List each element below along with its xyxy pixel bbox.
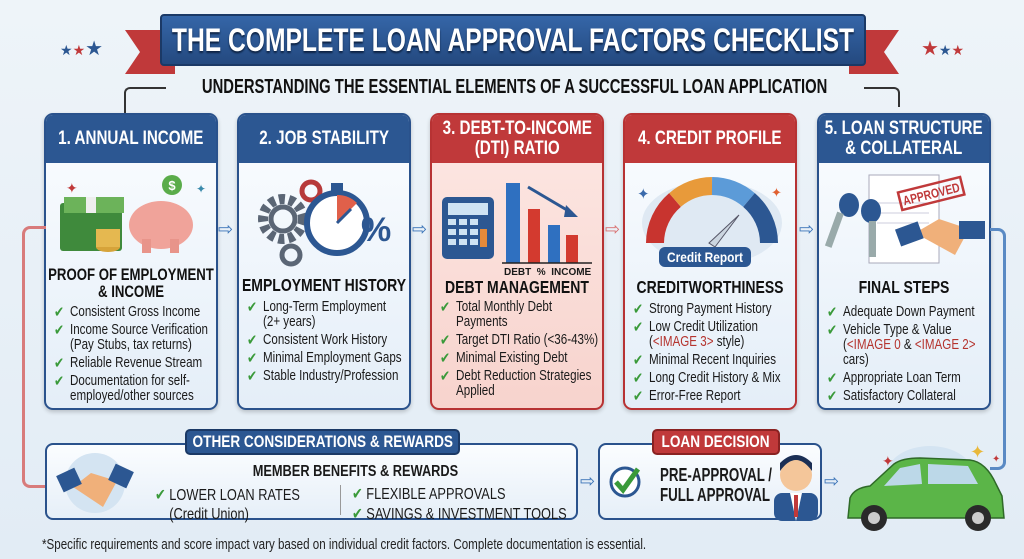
icon: green car: ✦ — [970, 442, 985, 462]
panel: credit profile: 4. CREDIT PROFILE — [638, 128, 782, 149]
text: member benefits: MEMBER BENEFITS & REWARDS — [253, 463, 458, 480]
icon: credit gauge — [637, 177, 782, 267]
icon: gears and stopwatch — [258, 180, 391, 266]
panel: DTI ratio — [430, 113, 604, 410]
text: proof of employment: Reliable Revenue Stream — [70, 355, 202, 371]
text: creditworthiness: Minimal Recent Inquiries — [649, 352, 776, 368]
title banner: THE COMPLETE LOAN APPROVAL FACTORS CHECKLIST — [172, 22, 854, 58]
arrow: right loop — [990, 228, 1006, 470]
text: proof of employment: Documentation for self-employed/other sources — [70, 373, 194, 404]
arrow: 3 to 4: ⇨ — [605, 219, 620, 239]
icon: green car: ✦ — [882, 453, 894, 469]
text: employment history: Minimal Employment Gaps — [263, 350, 402, 366]
icon: green car — [847, 442, 1005, 531]
icon: banker — [774, 455, 818, 521]
text: creditworthiness: Long Credit History & Mix — [649, 370, 781, 386]
text: debt management: Target DTI Ratio (<36-43%) — [456, 332, 598, 348]
subtitle — [124, 76, 900, 113]
icon: stars right: ★★★ — [921, 38, 964, 60]
panel: DTI ratio: 3. DEBT-TO-INCOME — [442, 118, 592, 139]
text: final steps: Vehicle Type & Value (<IMAGE 0 & <IMAGE 2> cars) — [843, 322, 976, 368]
text: employment history: Stable Industry/Profession — [263, 368, 398, 384]
panel: other considerations: ✔ FLEXIBLE APPROVALS — [352, 486, 505, 503]
text: pre-approval — [660, 465, 772, 505]
text: final steps: FINAL STEPS — [859, 277, 949, 297]
icon: handshake — [56, 453, 134, 513]
arrow: left loop back — [22, 226, 46, 488]
text: pre-approval: FULL APPROVAL — [660, 485, 770, 505]
text: creditworthiness — [634, 277, 784, 404]
panel: credit profile — [623, 113, 797, 410]
text: employment history: Consistent Work History — [263, 332, 387, 348]
panel: annual income — [44, 113, 218, 410]
subtitle: UNDERSTANDING THE ESSENTIAL ELEMENTS OF A SUCCESSFUL LOAN APPLICATION — [202, 76, 828, 98]
panel: other considerations: ✔ SAVINGS & INVESTMENT TOOLS — [352, 506, 567, 523]
text: creditworthiness: Error-Free Report — [649, 388, 741, 404]
heading: other considerations: OTHER CONSIDERATIONS & REWARDS — [192, 432, 453, 451]
text: proof of employment: & INCOME — [98, 283, 164, 301]
text: creditworthiness: Low Credit Utilization (<IMAGE 3> style) — [649, 319, 758, 350]
icon: keys, approved doc, handshake: APPROVED — [901, 180, 961, 208]
panel: annual income: 1. ANNUAL INCOME — [58, 128, 204, 149]
title banner — [60, 14, 964, 74]
text: employment history — [242, 275, 406, 384]
panel: job stability: 2. JOB STABILITY — [259, 128, 389, 149]
footer note: *Specific requirements and score impact vary based on individual credit factors. Complete documentation is essential. — [42, 537, 646, 553]
arrow: 4 to 5: ⇨ — [799, 219, 814, 239]
icon: money and piggy bank: $ — [168, 178, 176, 193]
heading: other considerations — [185, 429, 460, 455]
text: final steps: Satisfactory Collateral — [843, 388, 956, 404]
text: debt management — [441, 277, 598, 399]
text: employment history: EMPLOYMENT HISTORY — [242, 275, 406, 295]
panel: loan structure — [817, 113, 991, 410]
text: employment history: Long-Term Employment (2+ years) — [263, 299, 386, 330]
arrow: to car: ⇨ — [824, 471, 839, 491]
arrow: 1 to 2: ⇨ — [218, 219, 233, 239]
icon: money and piggy bank — [60, 175, 206, 253]
icon: credit gauge: ✦ — [771, 185, 782, 200]
text: final steps: Appropriate Loan Term — [843, 370, 961, 386]
text: proof of employment: Consistent Gross Income — [70, 304, 200, 320]
icon: check circle — [610, 466, 640, 498]
panel: job stability — [237, 113, 411, 410]
icon: stars left: ★★★ — [60, 38, 103, 60]
panel: other considerations: ✔ LOWER LOAN RATES — [155, 487, 300, 504]
text: creditworthiness: Strong Payment History — [649, 301, 772, 317]
panel: other considerations — [45, 443, 578, 520]
panel: other considerations: (Credit Union) — [169, 506, 249, 523]
icon: green car: ✦ — [992, 454, 1000, 465]
text: final steps — [828, 277, 976, 404]
arrow: to decision: ⇨ — [580, 471, 595, 491]
text: pre-approval: PRE-APPROVAL / — [660, 465, 772, 485]
text: chart labels: DEBT % INCOME — [504, 267, 591, 278]
text: proof of employment: Income Source Verification (Pay Stubs, tax returns) — [70, 322, 208, 353]
icon: gears and stopwatch: % — [361, 211, 391, 249]
text: proof of employment: PROOF OF EMPLOYMENT — [48, 266, 214, 284]
heading: loan decision — [652, 429, 780, 455]
panel: loan decision — [598, 443, 822, 520]
text: debt management: Total Monthly Debt Payments — [456, 299, 552, 330]
icon: credit gauge: ✦ — [637, 186, 650, 203]
text: debt management: Minimal Existing Debt — [456, 350, 568, 366]
panel: DTI ratio: (DTI) RATIO — [474, 138, 560, 159]
text: debt management: Debt Reduction Strategies Applied — [456, 368, 591, 399]
text: final steps: Adequate Down Payment — [843, 304, 975, 320]
text: debt management: DEBT MANAGEMENT — [445, 277, 589, 297]
text: creditworthiness: CREDITWORTHINESS — [636, 277, 784, 297]
icon: calculator and bar chart — [442, 183, 592, 264]
heading: loan decision: LOAN DECISION — [662, 432, 770, 451]
arrow: 2 to 3: ⇨ — [412, 219, 427, 239]
icon: keys, approved doc, handshake — [825, 174, 985, 264]
icon: money and piggy bank: ✦ — [196, 182, 206, 196]
icon: money and piggy bank: ✦ — [66, 180, 78, 196]
text: proof of employment — [48, 266, 214, 404]
panel: loan structure: 5. LOAN STRUCTURE — [825, 118, 983, 139]
panel: loan structure: & COLLATERAL — [845, 138, 963, 159]
icon: credit gauge: Credit Report — [667, 249, 743, 265]
